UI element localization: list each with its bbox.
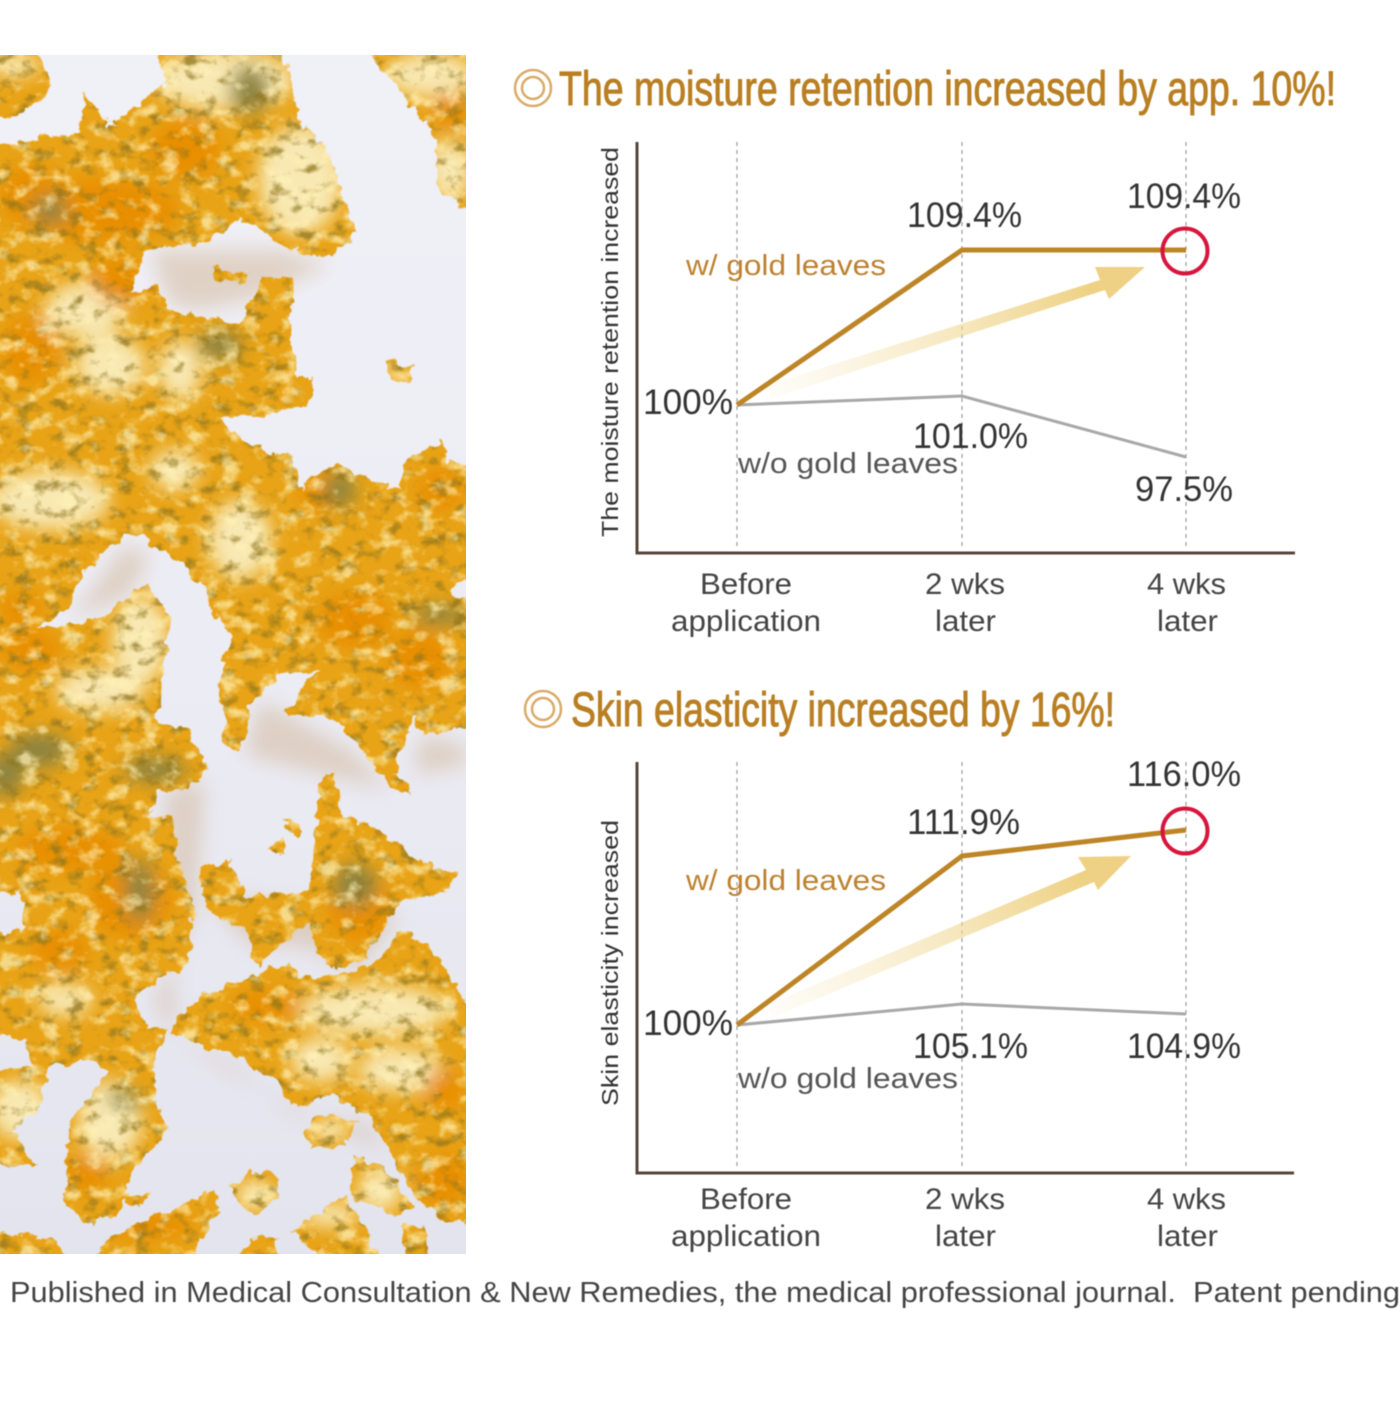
value labels — [643, 177, 1241, 509]
y axis title: The moisture retention increased — [597, 147, 623, 537]
heading text: Skin elasticity increased by 16%! — [571, 684, 1115, 737]
footnote: Published in Medical Consultation & New Remedies, the medical professional journal. Patent pending — [10, 1277, 1400, 1309]
value labels: 116.0% — [1127, 755, 1241, 794]
series label: without gold leaves: w/o gold leaves — [737, 448, 958, 480]
value labels: 105.1% — [913, 1027, 1028, 1066]
x axis labels: later — [1157, 1220, 1218, 1253]
x axis labels: application — [671, 605, 821, 638]
value labels — [643, 755, 1241, 1066]
marker: red circle — [1162, 228, 1208, 274]
line: without gold leaves — [737, 1004, 1186, 1025]
heading: moisture retention — [515, 63, 1336, 116]
photo: gold leaf flakes — [0, 55, 466, 1254]
axes — [637, 142, 1295, 553]
arrow: trend — [765, 267, 1145, 398]
chart: moisture retention — [597, 142, 1295, 638]
x axis labels: 2 wks — [925, 568, 1005, 601]
marker: red circle — [1162, 808, 1208, 854]
x axis labels: Before — [700, 568, 792, 601]
gridlines — [737, 762, 1186, 1170]
value labels: 100% — [643, 383, 733, 422]
value labels: 100% — [643, 1004, 733, 1043]
series label: with gold leaves: w/ gold leaves — [685, 250, 886, 282]
x axis labels — [671, 568, 1226, 638]
x axis labels: application — [671, 1220, 821, 1253]
x axis labels — [671, 1183, 1226, 1253]
x axis labels: 2 wks — [925, 1183, 1005, 1216]
arrow: trend — [765, 856, 1131, 1018]
chart: skin elasticity — [597, 755, 1294, 1253]
x axis labels: later — [1157, 605, 1218, 638]
series label: with gold leaves: w/ gold leaves — [685, 865, 886, 897]
x axis labels: Before — [700, 1183, 792, 1216]
x axis labels: 4 wks — [1147, 568, 1226, 601]
x axis labels: later — [935, 1220, 996, 1253]
line: with gold leaves — [737, 830, 1186, 1025]
value labels: 109.4% — [907, 196, 1022, 235]
series label: without gold leaves: w/o gold leaves — [737, 1063, 958, 1095]
axes — [637, 762, 1294, 1173]
icon: double ring bullet — [515, 70, 551, 106]
icon: double ring bullet — [525, 691, 561, 727]
y axis title: Skin elasticity increased — [597, 820, 623, 1106]
value labels: 111.9% — [907, 803, 1020, 842]
value labels: 109.4% — [1127, 177, 1241, 216]
line: with gold leaves — [737, 250, 1186, 405]
x axis labels: 4 wks — [1147, 1183, 1226, 1216]
value labels: 101.0% — [913, 417, 1028, 456]
line: without gold leaves — [737, 396, 1186, 457]
gridlines — [737, 142, 1186, 550]
value labels: 97.5% — [1135, 470, 1233, 509]
x axis labels: later — [935, 605, 996, 638]
heading: skin elasticity — [525, 684, 1115, 737]
value labels: 104.9% — [1127, 1027, 1241, 1066]
